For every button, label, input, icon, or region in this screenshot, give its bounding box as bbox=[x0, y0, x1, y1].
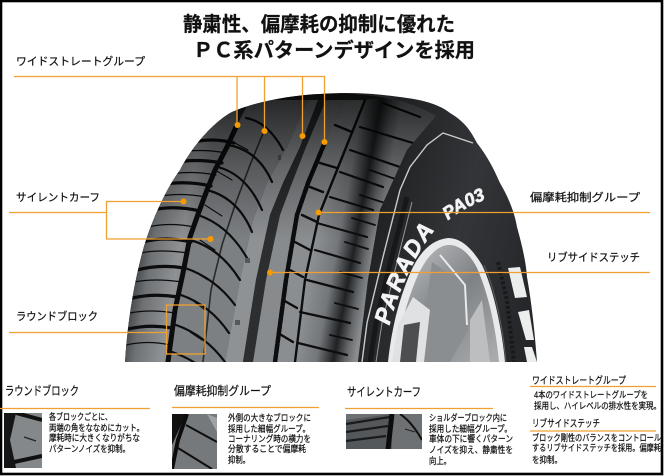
callout: silent curf: サイレントカーフ bbox=[16, 191, 100, 204]
panel: round block bbox=[0, 383, 150, 468]
title bbox=[183, 13, 475, 62]
panel: wide straight groove note: ワイドストレートグループ bbox=[532, 374, 626, 387]
brand lettering: PARADA bbox=[374, 224, 434, 326]
panel: silent curf: 採用した細幅グループ。 bbox=[429, 423, 512, 434]
title: ＰＣ系パターンデザインを採用 bbox=[193, 38, 475, 62]
callout: rib side stitch: リブサイドステッチ bbox=[547, 250, 640, 264]
panel: rib side stitch note: リブサイドステッチ bbox=[532, 417, 600, 430]
panel: silent curf bbox=[345, 385, 513, 466]
tire illustration bbox=[125, 93, 537, 362]
panel: round block: パターンノイズを抑制。 bbox=[49, 443, 130, 454]
panel: silent curf: 向上。 bbox=[429, 455, 451, 466]
panel: rib side stitch note bbox=[530, 417, 661, 465]
panel: round block: 各ブロックごとに、 bbox=[49, 411, 112, 422]
callout: uneven wear control bbox=[316, 190, 650, 216]
panel: silent curf: ショルダーブロック内に bbox=[429, 412, 507, 423]
panel: uneven wear control group bbox=[172, 384, 319, 469]
brand lettering: PA03 bbox=[442, 188, 484, 221]
panel: round block: 摩耗時に大きくなりがちな bbox=[49, 432, 140, 443]
callout: silent curf bbox=[9, 191, 214, 242]
panel: wide straight groove note bbox=[530, 374, 661, 411]
callout: wide straight groove: ワイドストレートグループ bbox=[16, 54, 145, 68]
panel: round block: 両端の角をななめにカット。 bbox=[49, 422, 144, 433]
panel: round block: ラウンドブロック bbox=[5, 383, 79, 398]
panel: silent curf: ノイズを抑え、静粛性を bbox=[429, 444, 513, 455]
callout: round block: ラウンドブロック bbox=[16, 309, 98, 323]
panel: uneven wear control group: 分散することで偏摩耗 bbox=[228, 443, 306, 454]
panel: rib side stitch note: を抑制。 bbox=[532, 454, 562, 465]
panel: uneven wear control group: 採用した細幅グループ。 bbox=[228, 423, 310, 434]
title: 静粛性、偏摩耗の抑制に優れた bbox=[183, 13, 455, 36]
panel: uneven wear control group: 外側の大きなブロックに bbox=[228, 412, 311, 423]
panel: uneven wear control group: 偏摩耗抑制グループ bbox=[174, 384, 271, 398]
callout: uneven wear control: 偏摩耗抑制グループ bbox=[530, 190, 640, 204]
panel: silent curf: サイレントカーフ bbox=[347, 385, 421, 399]
panel: uneven wear control group: 抑制。 bbox=[228, 454, 250, 465]
panel: uneven wear control group: コーナリング時の横力を bbox=[228, 433, 311, 444]
callout: wide straight groove bbox=[14, 54, 328, 145]
callout: rib side stitch bbox=[267, 250, 650, 276]
callout: round block bbox=[9, 305, 205, 354]
brand lettering bbox=[374, 188, 484, 326]
panel: silent curf: 車体の下に響くパターン bbox=[429, 433, 513, 444]
